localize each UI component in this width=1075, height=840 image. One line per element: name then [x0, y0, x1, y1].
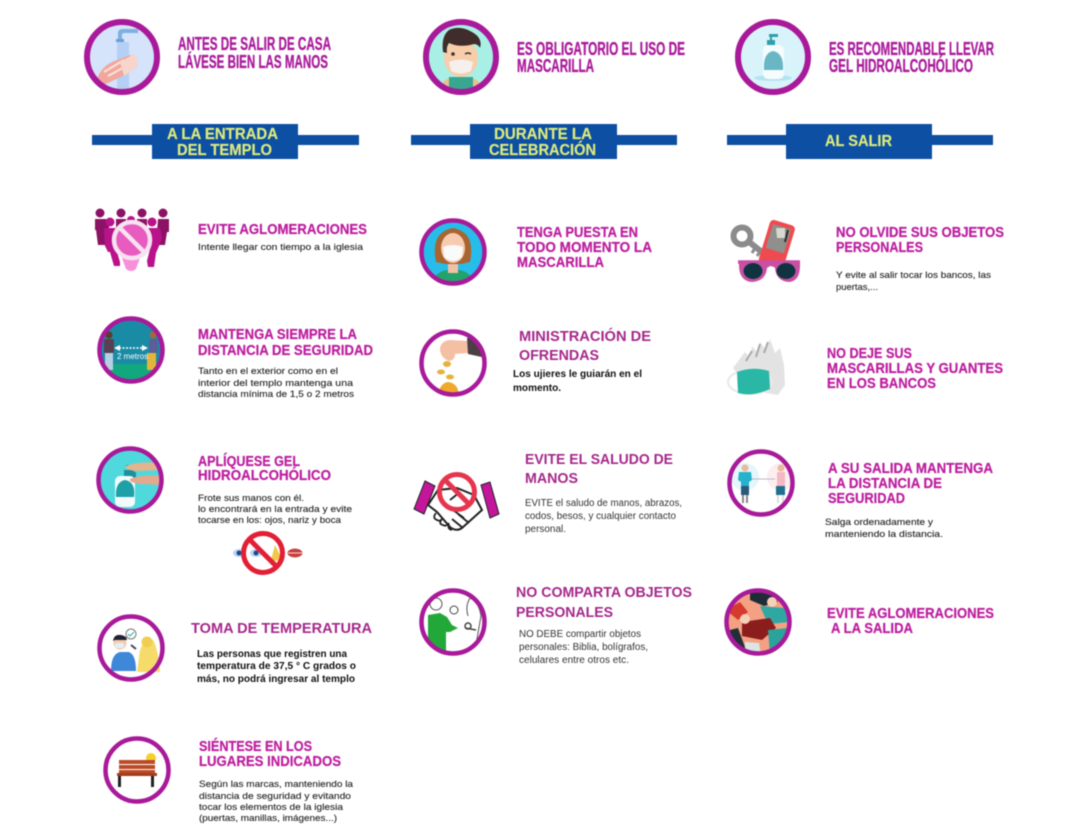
- heading: MINISTRACIÓN DE: [519, 327, 651, 345]
- text: celulares entre otros etc.: [519, 655, 629, 666]
- text: [198, 366, 354, 400]
- item: aglomeraciones a la salida: [722, 590, 994, 656]
- text: codos, besos, y cualquier contacto: [525, 511, 676, 522]
- text: Los ujieres le guiarán en el: [513, 369, 642, 380]
- heading: GEL HIDROALCOHÓLICO: [829, 55, 973, 76]
- heading: EN LOS BANCOS: [827, 375, 936, 392]
- heading: TENGA PUESTA EN: [517, 224, 638, 241]
- icon: crowd prohibited: [95, 208, 169, 271]
- item: saludo de manos: [414, 451, 682, 535]
- heading: ANTES DE SALIR DE CASA: [178, 34, 331, 54]
- heading: MASCARILLA: [517, 56, 594, 76]
- text: [525, 498, 682, 535]
- heading: [519, 327, 651, 364]
- top tip: mask: [426, 22, 685, 95]
- heading: [827, 345, 1003, 392]
- heading: NO OLVIDE SUS OBJETOS: [836, 224, 1004, 241]
- text: [199, 779, 354, 824]
- text: [825, 517, 943, 540]
- heading: OFRENDAS: [519, 347, 599, 364]
- icon: key, phone and sunglasses: [734, 219, 800, 282]
- text: Según las marcas, manteniendo la: [199, 779, 354, 790]
- icon: boy with mask: [426, 22, 496, 95]
- item: gel hidroalcoholico: [98, 448, 352, 572]
- text: interior del templo mantenga una: [198, 378, 354, 389]
- heading: NO DEJE SUS: [827, 345, 912, 362]
- text: Salga ordenadamente y: [825, 517, 933, 528]
- icon: do not touch face: [233, 534, 303, 572]
- text: Y evite al salir tocar los bancos, las: [836, 270, 991, 281]
- banner: al salir: [727, 124, 993, 159]
- item: mascarillas y guantes: [728, 339, 1003, 395]
- text: [836, 270, 991, 293]
- top tip: sanitiser gel: [738, 22, 994, 92]
- text: Tanto en el exterior como en el: [198, 366, 338, 377]
- heading: PERSONALES: [836, 239, 923, 256]
- text: [197, 649, 356, 685]
- text: tocar los elementos de la iglesia: [199, 802, 344, 813]
- icon: bench: [106, 738, 168, 802]
- icon: temperature check: [100, 616, 162, 680]
- heading: [517, 39, 685, 76]
- heading: [829, 39, 994, 76]
- heading: TOMA DE TEMPERATURA: [191, 620, 372, 637]
- text: NO DEBE compartir objetos: [519, 629, 641, 640]
- icon: hand with coins: [422, 332, 486, 395]
- item: salida distancia: [730, 452, 993, 540]
- text: (puertas, manillas, imágenes...): [199, 813, 337, 824]
- item: ofrendas: [422, 327, 651, 395]
- heading: EVITE AGLOMERACIONES: [827, 605, 994, 622]
- banner: al salir: AL SALIR: [825, 133, 892, 150]
- text: personales: Biblia, bolígrafos,: [519, 642, 648, 653]
- banner: durante la celebracion: CELEBRACIÓN: [489, 141, 596, 159]
- heading: [198, 453, 331, 484]
- text: [519, 629, 648, 666]
- item: distancia de seguridad: [98, 318, 373, 400]
- text: tocarse en los: ojos, nariz y boca: [198, 515, 342, 526]
- heading: SIÉNTESE EN LOS: [199, 738, 312, 755]
- text: Las personas que registren una: [197, 649, 347, 660]
- text: EVITE el saludo de manos, abrazos,: [525, 498, 682, 509]
- banner: a la entrada: [92, 124, 359, 159]
- text: [198, 493, 352, 526]
- heading: MANTENGA SIEMPRE LA: [198, 326, 357, 343]
- heading: [517, 224, 652, 271]
- icon: two people apart: [730, 452, 795, 514]
- heading: [199, 738, 341, 770]
- heading: PERSONALES: [516, 604, 613, 621]
- icon: handshake prohibited: [414, 474, 499, 530]
- heading: [198, 326, 373, 359]
- heading: EVITE AGLOMERACIONES: [198, 221, 367, 238]
- heading: A LA SALIDA: [831, 620, 913, 637]
- heading: LÁVESE BIEN LAS MANOS: [178, 51, 328, 72]
- icon: people sharing objects: [422, 590, 484, 654]
- banner: durante la celebracion: DURANTE LA: [494, 126, 592, 143]
- text: personal.: [525, 524, 566, 535]
- text: temperatura de 37,5 ° C grados o: [197, 661, 356, 672]
- item: no olvide objetos: [734, 219, 1004, 293]
- heading: [836, 224, 1004, 256]
- icon: woman with mask: [422, 220, 484, 285]
- heading: NO COMPARTA OBJETOS: [516, 584, 692, 601]
- text: puertas,...: [836, 282, 878, 293]
- heading: DISTANCIA DE SEGURIDAD: [198, 342, 373, 359]
- top tip: wash hands: [87, 22, 331, 92]
- item: mascarilla: [422, 220, 652, 285]
- heading: A SU SALIDA MANTENGA: [828, 460, 993, 477]
- heading: LUGARES INDICADOS: [199, 753, 341, 770]
- text: momento.: [513, 383, 561, 394]
- heading: MANOS: [525, 470, 578, 487]
- text: [513, 369, 642, 394]
- heading: [827, 605, 994, 637]
- heading: [828, 460, 993, 507]
- heading: LA DISTANCIA DE: [828, 475, 942, 492]
- heading: ES OBLIGATORIO EL USO DE: [517, 39, 685, 59]
- icon: two metres distance: 2 metros: [117, 352, 148, 361]
- text: más, no podrá ingresar al templo: [197, 674, 355, 685]
- icon: hand washing: [87, 22, 157, 92]
- heading: EVITE EL SALUDO DE: [525, 451, 673, 468]
- text: Frote sus manos con él.: [198, 493, 304, 504]
- heading: APLÍQUESE GEL: [198, 453, 300, 470]
- icon: two metres distance: [98, 318, 164, 386]
- banner: a la entrada: DEL TEMPLO: [177, 142, 272, 159]
- text: lo encontrará en la entrada y evite: [198, 504, 352, 515]
- icon: gel bottle: [738, 22, 808, 92]
- text: distancia mínima de 1,5 o 2 metros: [198, 389, 354, 400]
- heading: TODO MOMENTO LA: [517, 239, 652, 256]
- heading: SEGURIDAD: [828, 490, 905, 507]
- heading: MASCARILLA: [517, 254, 604, 271]
- text: distancia de seguridad y evitando: [199, 791, 351, 802]
- item: evite aglomeraciones: [95, 208, 367, 271]
- icon: mask and gloves: [728, 339, 785, 395]
- text: manteniendo la distancia.: [825, 529, 943, 540]
- heading: [178, 34, 331, 72]
- icon: crowd in circle: [722, 590, 790, 656]
- icon: hands and gel: [98, 448, 162, 512]
- text: Intente llegar con tiempo a la iglesia: [198, 242, 364, 253]
- heading: [516, 584, 692, 621]
- heading: [525, 451, 673, 487]
- heading: HIDROALCOHÓLICO: [198, 466, 331, 484]
- banner: a la entrada: A LA ENTRADA: [167, 126, 278, 143]
- banner: durante la celebracion: [411, 124, 677, 159]
- item: objetos personales: [422, 584, 692, 666]
- heading: MASCARILLAS Y GUANTES: [827, 360, 1003, 377]
- item: sientese: [106, 738, 354, 824]
- item: toma de temperatura: [100, 616, 372, 685]
